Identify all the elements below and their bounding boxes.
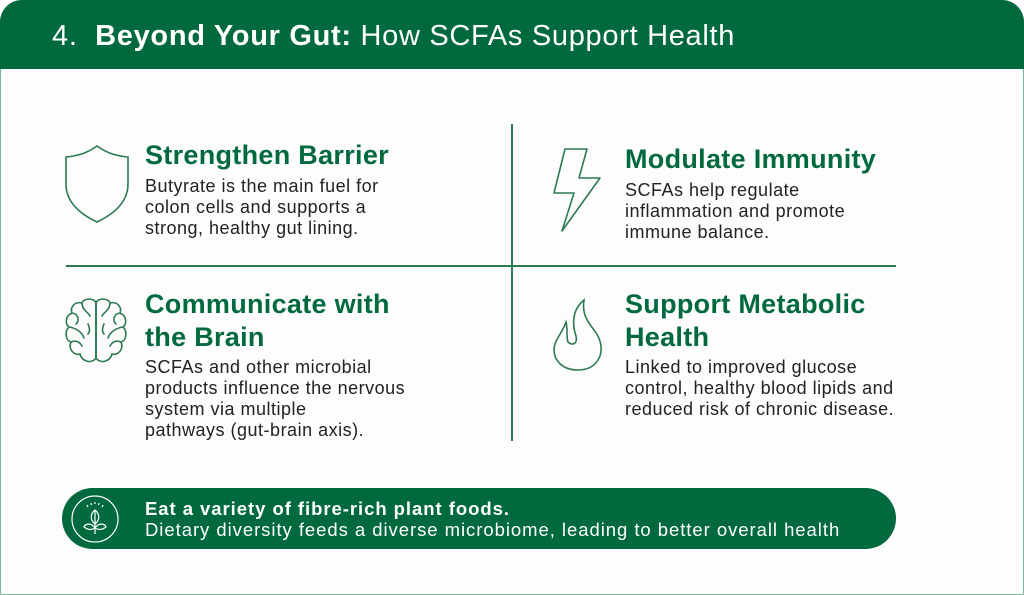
title [0,0,1024,69]
heading: strengthen barrier: Strengthen Barrier [145,140,389,170]
text: modulate immunity [625,180,845,242]
text: strengthen barrier [145,176,379,238]
heading: communicate with the brain: Communicate with [145,289,390,319]
text: modulate immunity: inflammation and promote [625,201,845,221]
icon: brain [65,298,127,362]
text: brain: system via multiple [145,399,307,419]
title: 4. Beyond Your Gut: How SCFAs Support Health [52,20,735,52]
icon: flame [553,298,602,371]
text: metabolic [625,357,894,419]
text: strengthen barrier: strong, healthy gut lining. [145,218,359,238]
text: metabolic: control, healthy blood lipids and [625,378,894,398]
heading: modulate immunity: Modulate Immunity [625,144,876,174]
text: strengthen barrier: colon cells and supports a [145,197,366,217]
callout banner [62,488,896,549]
text: strengthen barrier: Butyrate is the main fuel for [145,176,379,196]
text: modulate immunity: SCFAs help regulate [625,180,800,200]
text: banner: Dietary diversity feeds a diverse microbiome, leading to better overall health [145,519,840,540]
heading: support metabolic health: Support Metabolic [625,289,866,319]
heading: communicate with the brain: the Brain [145,322,265,352]
text: metabolic: Linked to improved glucose [625,357,857,377]
heading: communicate with the brain [145,289,390,352]
text: brain: pathways (gut-brain axis). [145,420,364,440]
icon: shield [65,145,129,223]
text: banner: Eat a variety of fibre-rich plant foods. [145,498,510,519]
text: brain: SCFAs and other microbial [145,357,372,377]
text: brain: products influence the nervous [145,378,405,398]
heading: support metabolic health [625,289,866,352]
icon: plant [71,495,119,543]
text: metabolic: reduced risk of chronic disease. [625,399,894,419]
text: brain [145,357,405,440]
text: modulate immunity: immune balance. [625,222,770,242]
text: banner [145,498,840,540]
heading: support metabolic health: Health [625,322,709,352]
